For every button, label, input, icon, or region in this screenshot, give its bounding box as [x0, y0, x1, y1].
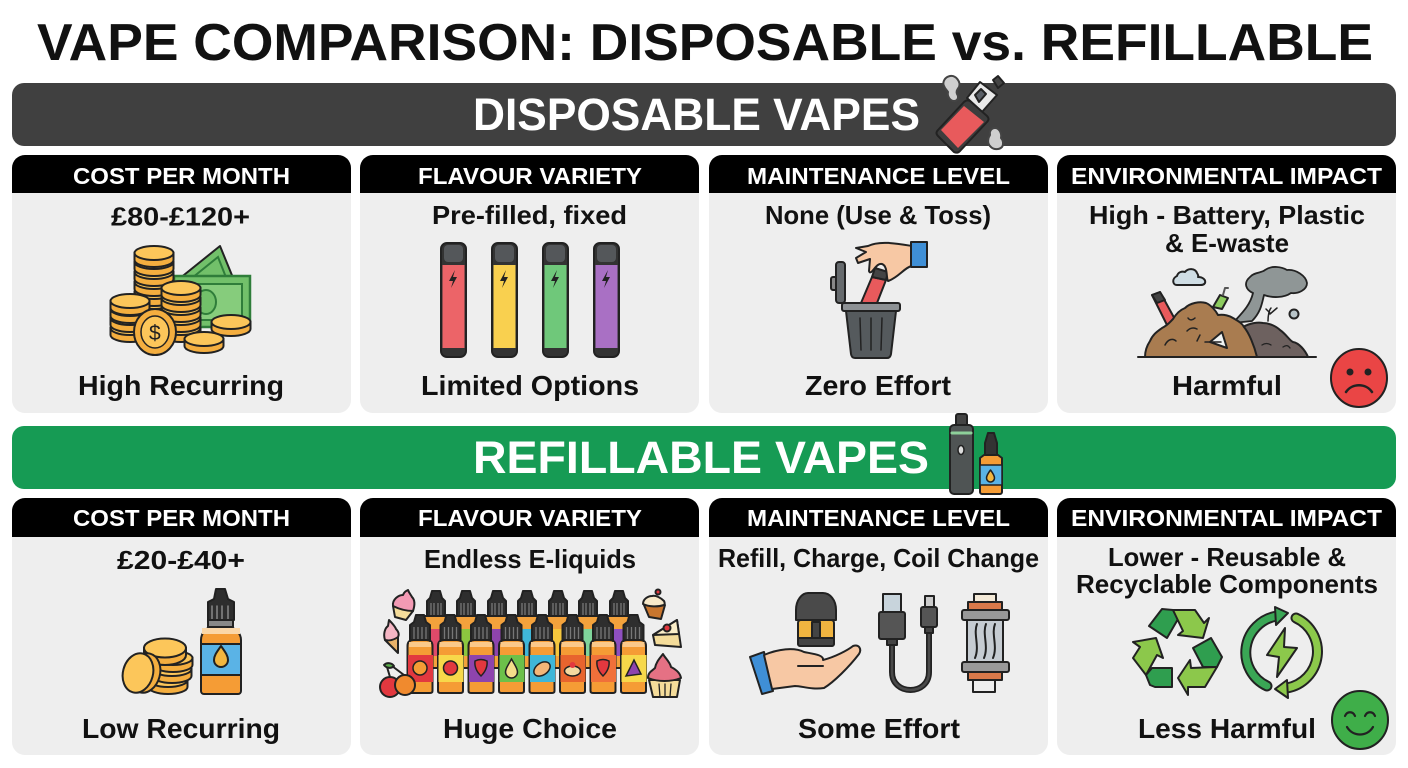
- icon: happy face: [1332, 691, 1388, 749]
- header: environmental impact: [1057, 155, 1396, 193]
- header: maintenance level: MAINTENANCE LEVEL: [747, 163, 1010, 189]
- caption: huge choice: Huge Choice: [443, 713, 617, 744]
- caption: some effort: Some Effort: [798, 713, 960, 744]
- icon: renewable energy ring with bolt: [1246, 607, 1317, 698]
- caption: limited options: Limited Options: [421, 370, 639, 401]
- banner: disposable vapes: [12, 83, 1396, 146]
- back row of bottles: [424, 591, 631, 668]
- panel: disposable environmental impact: [1057, 155, 1396, 413]
- icon: coins and banknotes: $: [149, 322, 161, 345]
- desserts and fruit: [380, 590, 681, 697]
- header: environmental impact: [1057, 498, 1396, 537]
- panel: refillable maintenance level: [709, 498, 1048, 755]
- caption: high recurring: High Recurring: [78, 370, 284, 401]
- caption: zero effort: Zero Effort: [805, 370, 951, 401]
- header: environmental impact: ENVIRONMENTAL IMPACT: [1071, 505, 1383, 531]
- header: cost per month: [12, 498, 351, 537]
- value: price: £20-£40+: [117, 545, 245, 575]
- panel: disposable maintenance level: [709, 155, 1048, 413]
- icon: refillable vape and bottle: [950, 414, 1002, 494]
- banner: refillable vapes: REFILLABLE VAPES: [473, 432, 929, 483]
- title: VAPE COMPARISON: DISPOSABLE vs. REFILLABLE: [37, 14, 1373, 72]
- value: endless e-liquids: Endless E-liquids: [424, 544, 636, 574]
- banner: refillable vapes: [12, 426, 1396, 489]
- header: environmental impact: ENVIRONMENTAL IMPACT: [1071, 163, 1383, 189]
- panel: refillable flavour variety: [360, 498, 699, 755]
- header: flavour variety: [360, 498, 699, 537]
- value: high impact: & E-waste: [1165, 228, 1289, 258]
- icon: replacement coil: [962, 594, 1009, 692]
- caption: less harmful: Less Harmful: [1138, 713, 1316, 744]
- icon: coins and banknotes: [110, 246, 250, 355]
- icon: recycling arrows: [1133, 609, 1222, 695]
- value: high impact: [1089, 200, 1365, 258]
- icon: four disposable pens: [441, 243, 619, 357]
- header: maintenance level: [709, 155, 1048, 193]
- caption: harmful: Harmful: [1172, 370, 1282, 401]
- front row of bottles: [408, 615, 646, 693]
- value: high impact: High - Battery, Plastic: [1089, 200, 1365, 230]
- header: flavour variety: FLAVOUR VARIETY: [418, 505, 642, 531]
- value: pre-filled: Pre-filled, fixed: [432, 200, 627, 230]
- value: none: None (Use & Toss): [765, 200, 991, 230]
- value: refill charge coil change: Refill, Charge, Coil Change: [718, 543, 1039, 573]
- header: maintenance level: [709, 498, 1048, 537]
- icon: hand dropping vape into bin: [831, 242, 927, 358]
- panel: disposable flavour variety: [360, 155, 699, 413]
- banner: disposable vapes: DISPOSABLE VAPES: [473, 89, 920, 140]
- icon: usb charging cable: [879, 594, 937, 690]
- value: lower impact: [1076, 542, 1378, 599]
- icon: sad face: [1331, 349, 1387, 407]
- header: cost per month: [12, 155, 351, 193]
- header: maintenance level: MAINTENANCE LEVEL: [747, 505, 1010, 531]
- panel: refillable environmental impact: [1057, 498, 1396, 755]
- value: lower impact: Recyclable Components: [1076, 569, 1378, 599]
- icon: pod on hand: [750, 593, 860, 694]
- value: lower impact: Lower - Reusable &: [1108, 542, 1346, 572]
- header: flavour variety: [360, 155, 699, 193]
- header: flavour variety: FLAVOUR VARIETY: [418, 163, 642, 189]
- icon: landfill with smoke: [1138, 267, 1316, 357]
- icon: rows of e-liquid bottles and desserts: [380, 590, 681, 697]
- header: cost per month: COST PER MONTH: [73, 163, 290, 189]
- icon: coins and e-liquid bottle: [118, 589, 241, 696]
- panel: disposable cost per month: [12, 155, 351, 413]
- caption: low recurring: Low Recurring: [82, 713, 280, 744]
- icon: disposable vape with smoke: [936, 76, 1004, 153]
- header: cost per month: COST PER MONTH: [73, 505, 290, 531]
- panel: refillable cost per month: [12, 498, 351, 755]
- value: price: £80-£120+: [111, 202, 250, 232]
